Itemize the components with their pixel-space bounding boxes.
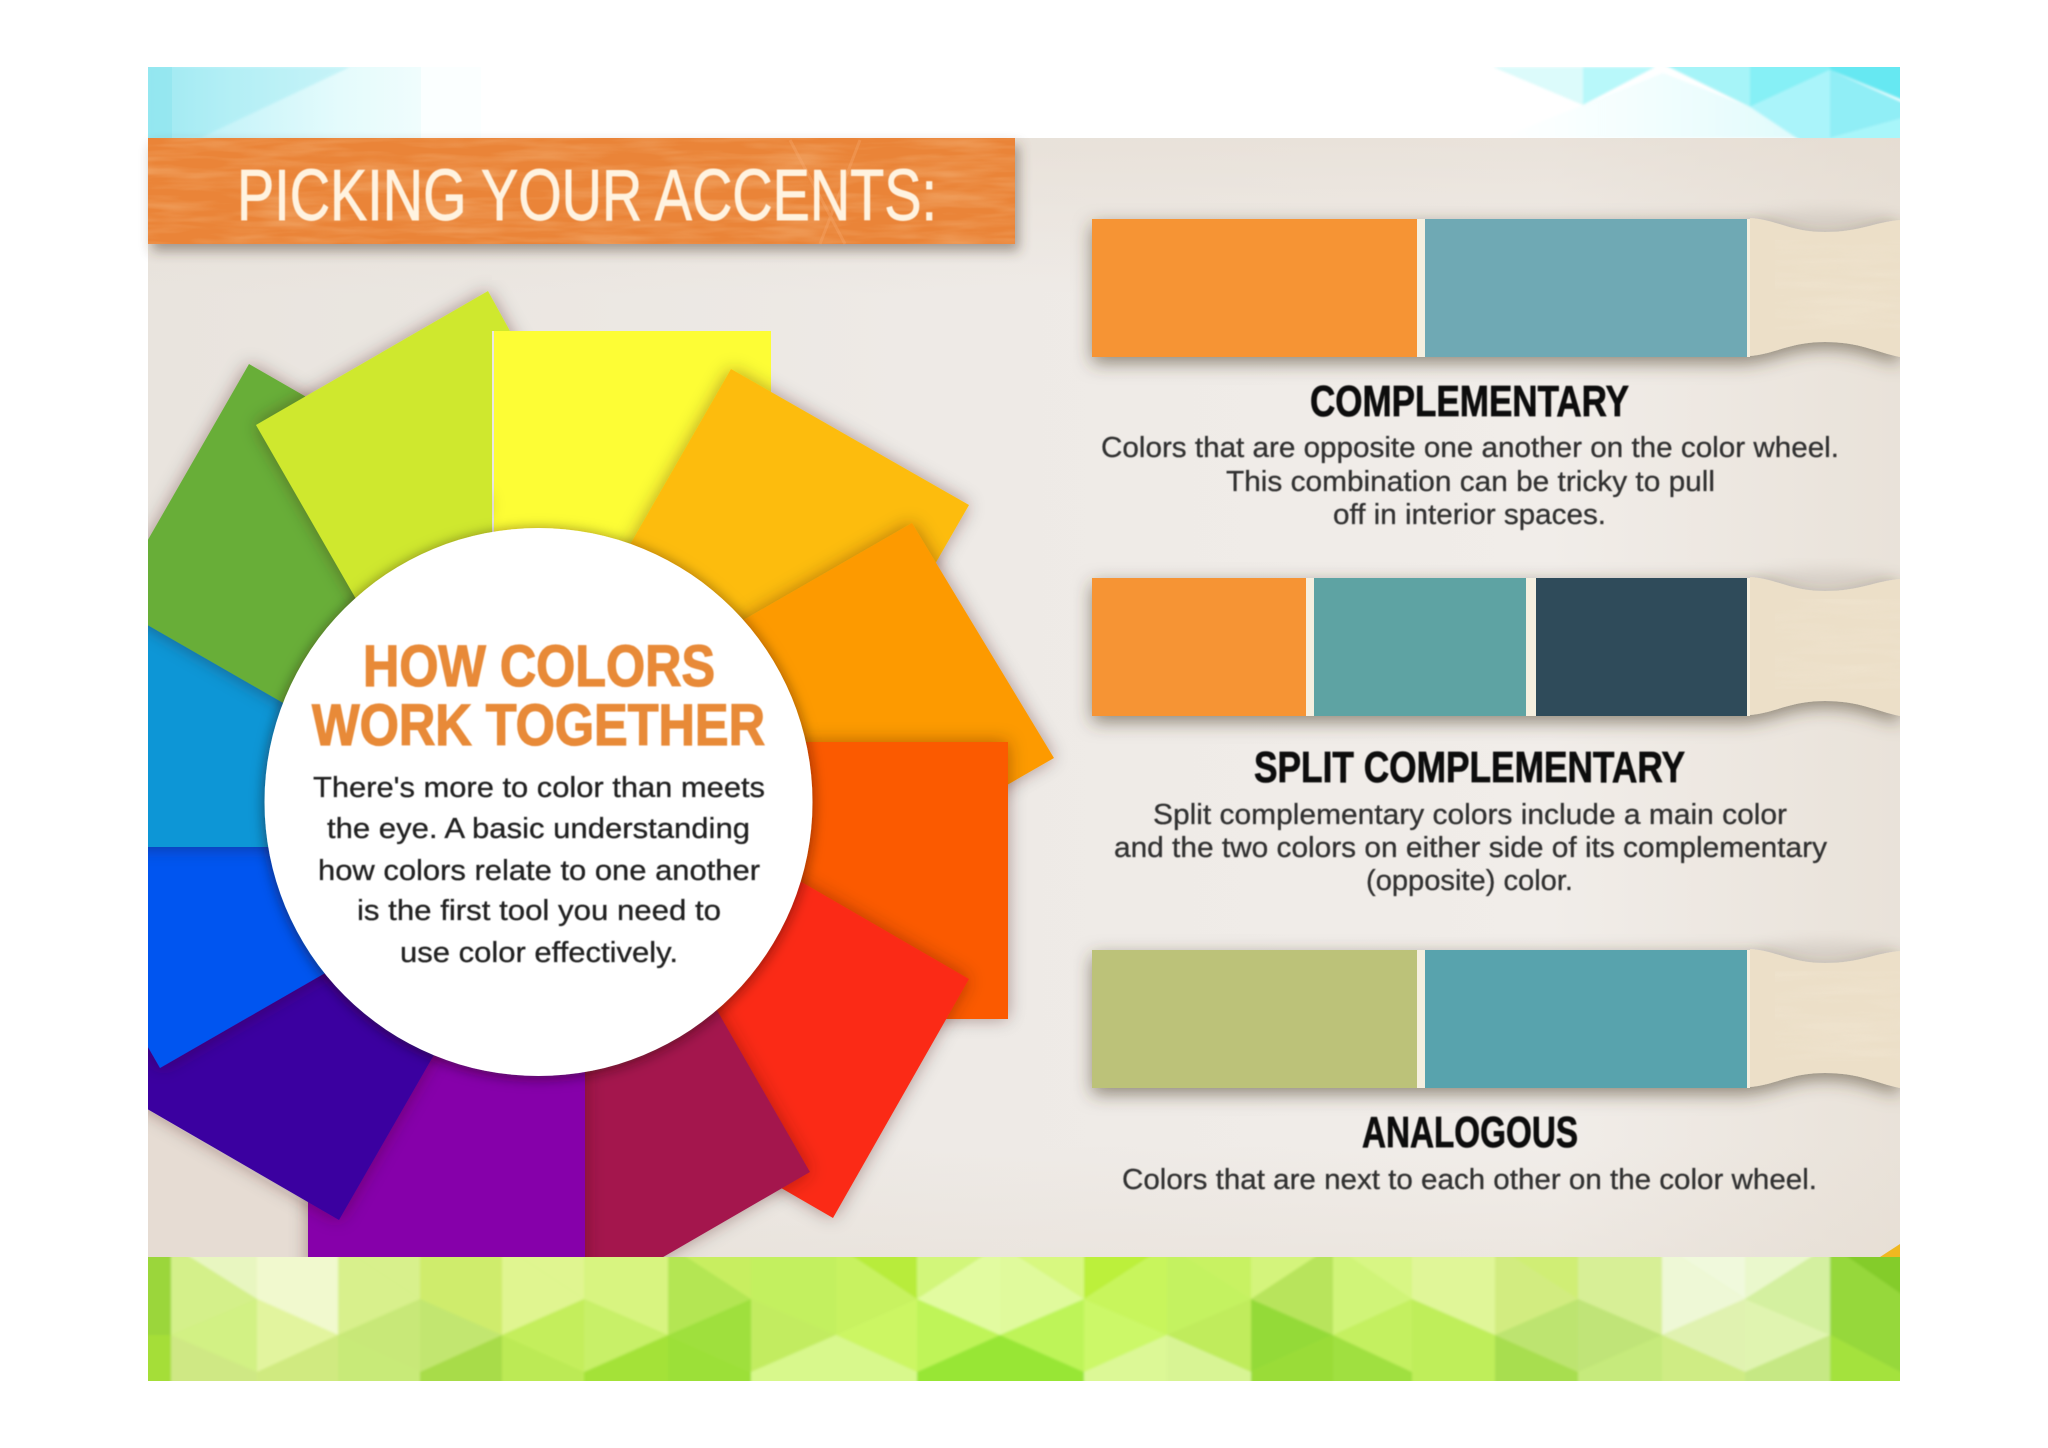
chip: purple — [296, 1055, 592, 1257]
strip: analogous — [1092, 941, 1900, 1088]
top band: cyan polygon pattern — [148, 67, 1900, 138]
description: split complementary: and the two colors on either side of its complementary — [1114, 832, 1827, 864]
title text: PICKING YOUR ACCENTS: — [237, 156, 937, 236]
chip: bright blue — [148, 847, 329, 1072]
circle text — [313, 772, 765, 969]
block: split complementary text — [1114, 743, 1827, 897]
title banner — [148, 138, 1015, 244]
bottom band: green polygon pattern — [148, 1257, 1900, 1381]
center circle — [264, 528, 812, 1076]
heading: split complementary: SPLIT COMPLEMENTARY — [1254, 743, 1685, 792]
circle heading: WORK TOGETHER — [312, 693, 765, 758]
description: complementary — [1101, 432, 1839, 531]
chip: orange red — [800, 730, 1020, 1030]
chip: amber — [620, 362, 976, 620]
chip: lime — [251, 284, 523, 604]
strip: split complementary — [1092, 569, 1900, 716]
description: complementary: Colors that are opposite one another on the color wheel. — [1101, 432, 1839, 464]
block: analogous text — [1122, 1108, 1817, 1196]
circle heading: HOW COLORS — [363, 634, 715, 699]
description: split complementary: Split complementary colors include a main color — [1153, 799, 1787, 831]
strip: complementary — [1092, 210, 1900, 357]
circle text: is the first tool you need to — [357, 895, 721, 927]
circle text: There's more to color than meets — [313, 772, 765, 804]
heading: analogous: ANALOGOUS — [1362, 1108, 1578, 1157]
color wheel — [148, 284, 1060, 1257]
chip: maroon — [585, 1004, 817, 1257]
description: split complementary — [1114, 799, 1827, 897]
description: split complementary: (opposite) color. — [1366, 865, 1573, 897]
chip: indigo — [148, 973, 440, 1225]
chip: yellow — [494, 331, 771, 544]
circle heading — [312, 634, 765, 758]
chip: light blue — [148, 625, 283, 858]
circle text: the eye. A basic understanding — [327, 813, 750, 845]
chip: green — [148, 358, 496, 712]
swatch strips — [1092, 210, 1900, 1088]
chip: red — [716, 872, 976, 1224]
heading: complementary: COMPLEMENTARY — [1310, 377, 1629, 426]
chip: orange — [736, 516, 1060, 797]
circle text: how colors relate to one another — [318, 855, 760, 887]
description: complementary: This combination can be tricky to pull — [1226, 466, 1715, 498]
circle text: use color effectively. — [400, 937, 678, 969]
description: complementary: off in interior spaces. — [1333, 499, 1606, 531]
description: analogous: Colors that are next to each other on the color wheel. — [1122, 1164, 1817, 1196]
block: complementary text — [1101, 377, 1839, 531]
main beige panel — [148, 138, 1900, 1257]
